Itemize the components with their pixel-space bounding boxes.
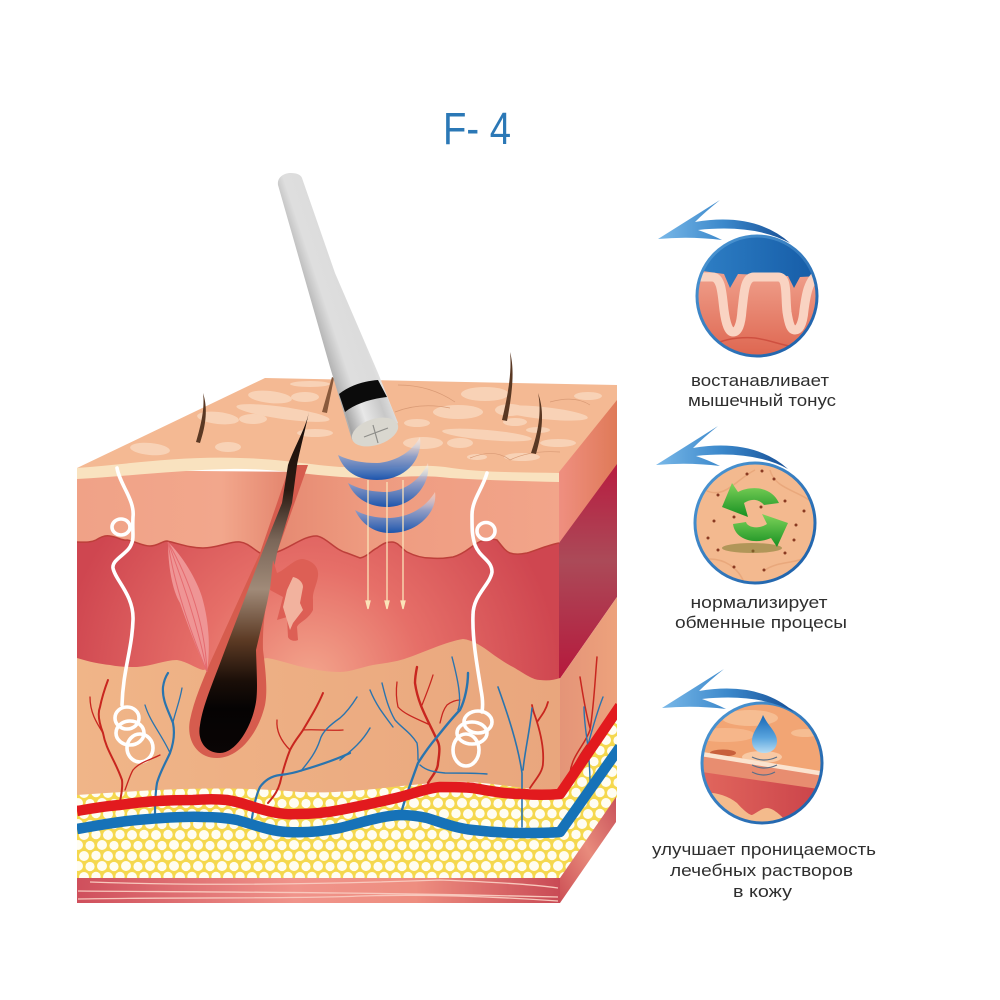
- subcutaneous layer: [77, 639, 560, 810]
- caption: нормализирует: [690, 594, 828, 612]
- right nerve fibre: [453, 473, 495, 766]
- icon: skin folds in circle: [695, 225, 820, 356]
- title: F- 4: [443, 103, 511, 154]
- applicator probe: [278, 173, 402, 452]
- red artery branches: [90, 657, 597, 803]
- blue vein: [77, 747, 620, 833]
- caption: улучшает проницаемость: [652, 841, 876, 859]
- benefit 2: metabolism: [656, 426, 847, 632]
- red artery: [77, 706, 620, 814]
- sebaceous gland: [270, 559, 318, 641]
- benefit 3: permeability: [652, 669, 876, 901]
- upper dermis layer: [77, 470, 559, 570]
- lower dermis layer: [77, 536, 559, 690]
- arrector pili muscle: [168, 542, 209, 672]
- cream epidermis band: [77, 458, 559, 482]
- left nerve fibre: [112, 468, 153, 762]
- arrow: [658, 200, 790, 243]
- surface hairs: [196, 352, 542, 454]
- caption: обменные процесы: [675, 614, 847, 632]
- benefit 1: muscle tone: [658, 200, 836, 410]
- caption: лечебных растворов: [670, 862, 853, 880]
- icon: green cycle arrows in circle: [695, 463, 815, 585]
- fat layer: [77, 782, 560, 878]
- arrow: [656, 426, 788, 469]
- side face of block: [559, 400, 617, 903]
- blue vein branches: [145, 657, 603, 827]
- icon: water drop on skin in circle: [700, 702, 824, 824]
- top skin surface: [77, 378, 617, 474]
- energy arrows: [366, 480, 405, 609]
- energy waves: [338, 437, 435, 533]
- caption: востанавливает: [691, 372, 829, 390]
- hair follicle with bulb: [189, 412, 309, 758]
- muscle layer: [77, 878, 560, 903]
- arrow: [662, 669, 794, 712]
- caption: в кожу: [733, 883, 793, 901]
- skin cross-section block: [77, 352, 620, 903]
- caption: мышечный тонус: [688, 392, 836, 410]
